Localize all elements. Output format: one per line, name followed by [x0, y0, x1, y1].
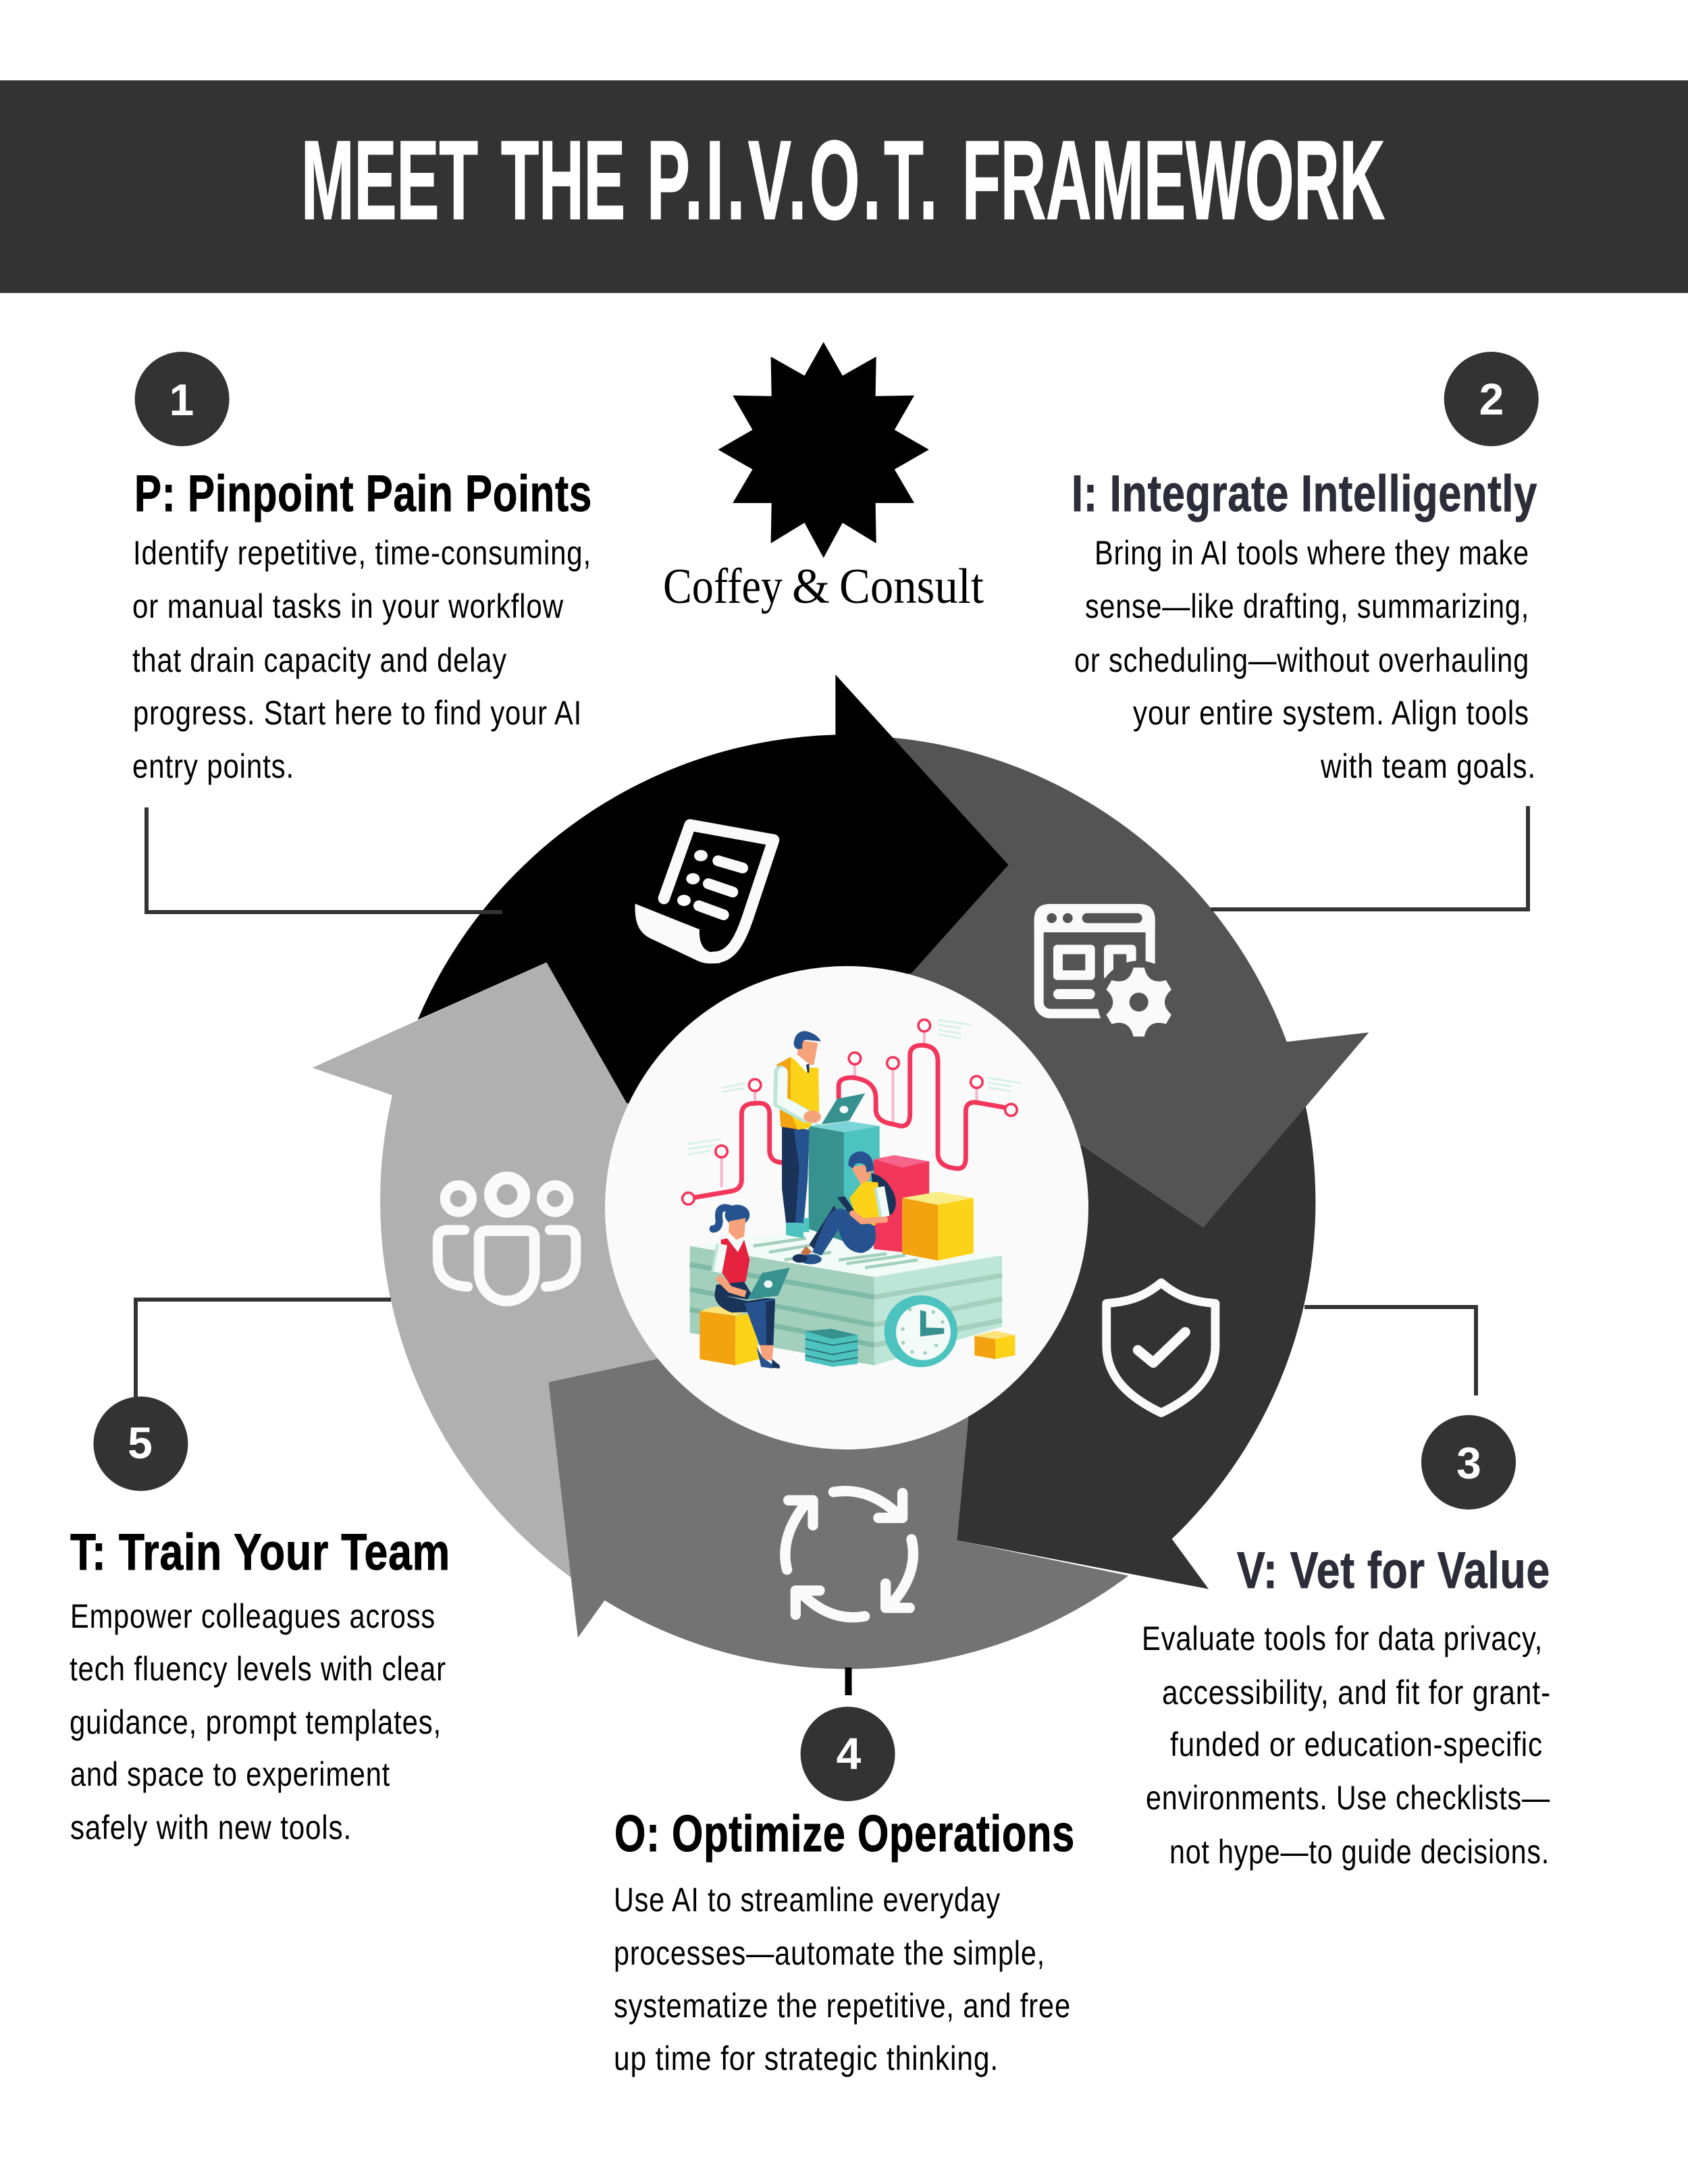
connector step 2 — [1211, 806, 1528, 909]
body 3: environments. Use checklists— — [1146, 1779, 1550, 1817]
body 3: not hype—to guide decisions. — [1169, 1833, 1550, 1871]
data points — [683, 1019, 1017, 1204]
body 2: or scheduling—without overhauling — [1074, 641, 1529, 679]
number badge 2: 2 — [1479, 374, 1504, 424]
box red — [874, 1155, 929, 1252]
panel: step 5 — [70, 1396, 450, 1846]
body 3: funded or education-specific — [1170, 1726, 1543, 1763]
header banner — [0, 80, 1688, 293]
arrow 1 black — [418, 674, 1008, 1148]
body 5: Empower colleagues across — [70, 1597, 436, 1635]
figure: seated woman right — [793, 1152, 896, 1264]
number badge 4: 4 — [837, 1728, 862, 1778]
box yellow large — [902, 1192, 974, 1260]
body 4: Use AI to streamline everyday — [614, 1881, 1001, 1919]
panel: step 2 — [1072, 352, 1539, 785]
box teal — [809, 1121, 880, 1242]
body 5 — [70, 1597, 446, 1846]
body 5: guidance, prompt templates, — [70, 1703, 442, 1741]
body 4: processes—automate the simple, — [614, 1934, 1045, 1972]
body 1: that drain capacity and delay — [132, 641, 507, 679]
panel: step 1 — [132, 352, 592, 785]
paper lines — [687, 1020, 1022, 1154]
box yellow small — [974, 1331, 1015, 1359]
logo: Coffey & Consult — [663, 342, 984, 614]
number badge 4 — [801, 1707, 895, 1801]
data line — [688, 1045, 1007, 1198]
paper stack — [690, 1229, 1002, 1365]
icon: team people — [438, 1178, 576, 1301]
body 2: sense—like drafting, summarizing, — [1085, 587, 1529, 625]
stems — [722, 1032, 976, 1187]
cycle wheel — [312, 674, 1369, 1669]
body 1: or manual tasks in your workflow — [132, 587, 564, 625]
center circle — [605, 966, 1088, 1449]
logo wordmark — [663, 559, 984, 614]
arrow 5 light gray — [312, 962, 805, 1578]
arrow 1 head overlap — [805, 674, 1008, 988]
figure: standing man — [776, 1031, 865, 1238]
body 2: your entire system. Align tools — [1133, 694, 1529, 732]
body 3: Evaluate tools for data privacy, — [1142, 1620, 1543, 1657]
body 1: Identify repetitive, time-consuming, — [133, 534, 591, 572]
arrow 3 charcoal — [872, 1105, 1315, 1589]
icon: browser with gear — [1034, 904, 1180, 1044]
connector step 3 — [1304, 1307, 1476, 1395]
number badge 5: 5 — [128, 1418, 153, 1468]
teal document stack — [806, 1329, 858, 1367]
number badge 1 — [135, 352, 230, 446]
connector step 1 — [147, 807, 502, 912]
body 1: entry points. — [132, 747, 294, 785]
arrow 2 dark gray — [858, 736, 1369, 1227]
title — [301, 118, 1385, 243]
body 2: with team goals. — [1320, 747, 1536, 785]
connector step 4 — [845, 1668, 852, 1695]
panel: step 4 — [614, 1707, 1075, 2077]
number badge 5 — [93, 1396, 188, 1491]
icon: shield check — [1107, 1283, 1215, 1413]
body 1: progress. Start here to find your AI — [133, 694, 582, 732]
number badge 3: 3 — [1456, 1438, 1481, 1488]
number badge 2 — [1444, 352, 1539, 446]
body 5: and space to experiment — [70, 1755, 390, 1793]
logo wordmark: & — [792, 559, 830, 614]
center illustration: team with charts — [683, 1019, 1022, 1368]
body 4: up time for strategic thinking. — [614, 2040, 999, 2077]
heading 5: T: Train Your Team — [70, 1524, 450, 1581]
logo wordmark: Coffey — [663, 559, 783, 614]
heading 3: V: Vet for Value — [1237, 1542, 1550, 1599]
arrow 4 mid gray — [548, 1242, 1128, 1669]
connector step 5 — [136, 1300, 391, 1397]
body 3: accessibility, and fit for grant- — [1162, 1674, 1551, 1711]
body 2 — [1074, 534, 1536, 785]
clock — [885, 1296, 957, 1367]
icon: starburst — [718, 342, 929, 558]
body 5: tech fluency levels with clear — [70, 1650, 446, 1688]
body 1 — [132, 534, 591, 785]
logo wordmark: Consult — [839, 559, 984, 614]
title: THE — [501, 118, 625, 243]
panel: step 3 — [1142, 1415, 1551, 1871]
body 2: Bring in AI tools where they make — [1094, 534, 1529, 572]
body 4 — [614, 1881, 1071, 2077]
heading 4: O: Optimize Operations — [614, 1805, 1075, 1863]
box yellow seat — [700, 1306, 760, 1365]
icon: refresh arrows — [785, 1491, 913, 1618]
figure: seated woman left — [713, 1205, 790, 1368]
heading 1: P: Pinpoint Pain Points — [134, 465, 592, 523]
body 3 — [1142, 1620, 1551, 1871]
title: P.I.V.O.T. — [647, 118, 941, 243]
icon: document list — [635, 825, 774, 963]
number badge 1: 1 — [169, 375, 194, 425]
body 5: safely with new tools. — [70, 1809, 352, 1846]
number badge 3 — [1421, 1415, 1516, 1510]
body 4: systematize the repetitive, and free — [614, 1987, 1071, 2025]
title: MEET — [301, 118, 478, 243]
heading 2: I: Integrate Intelligently — [1072, 465, 1537, 523]
